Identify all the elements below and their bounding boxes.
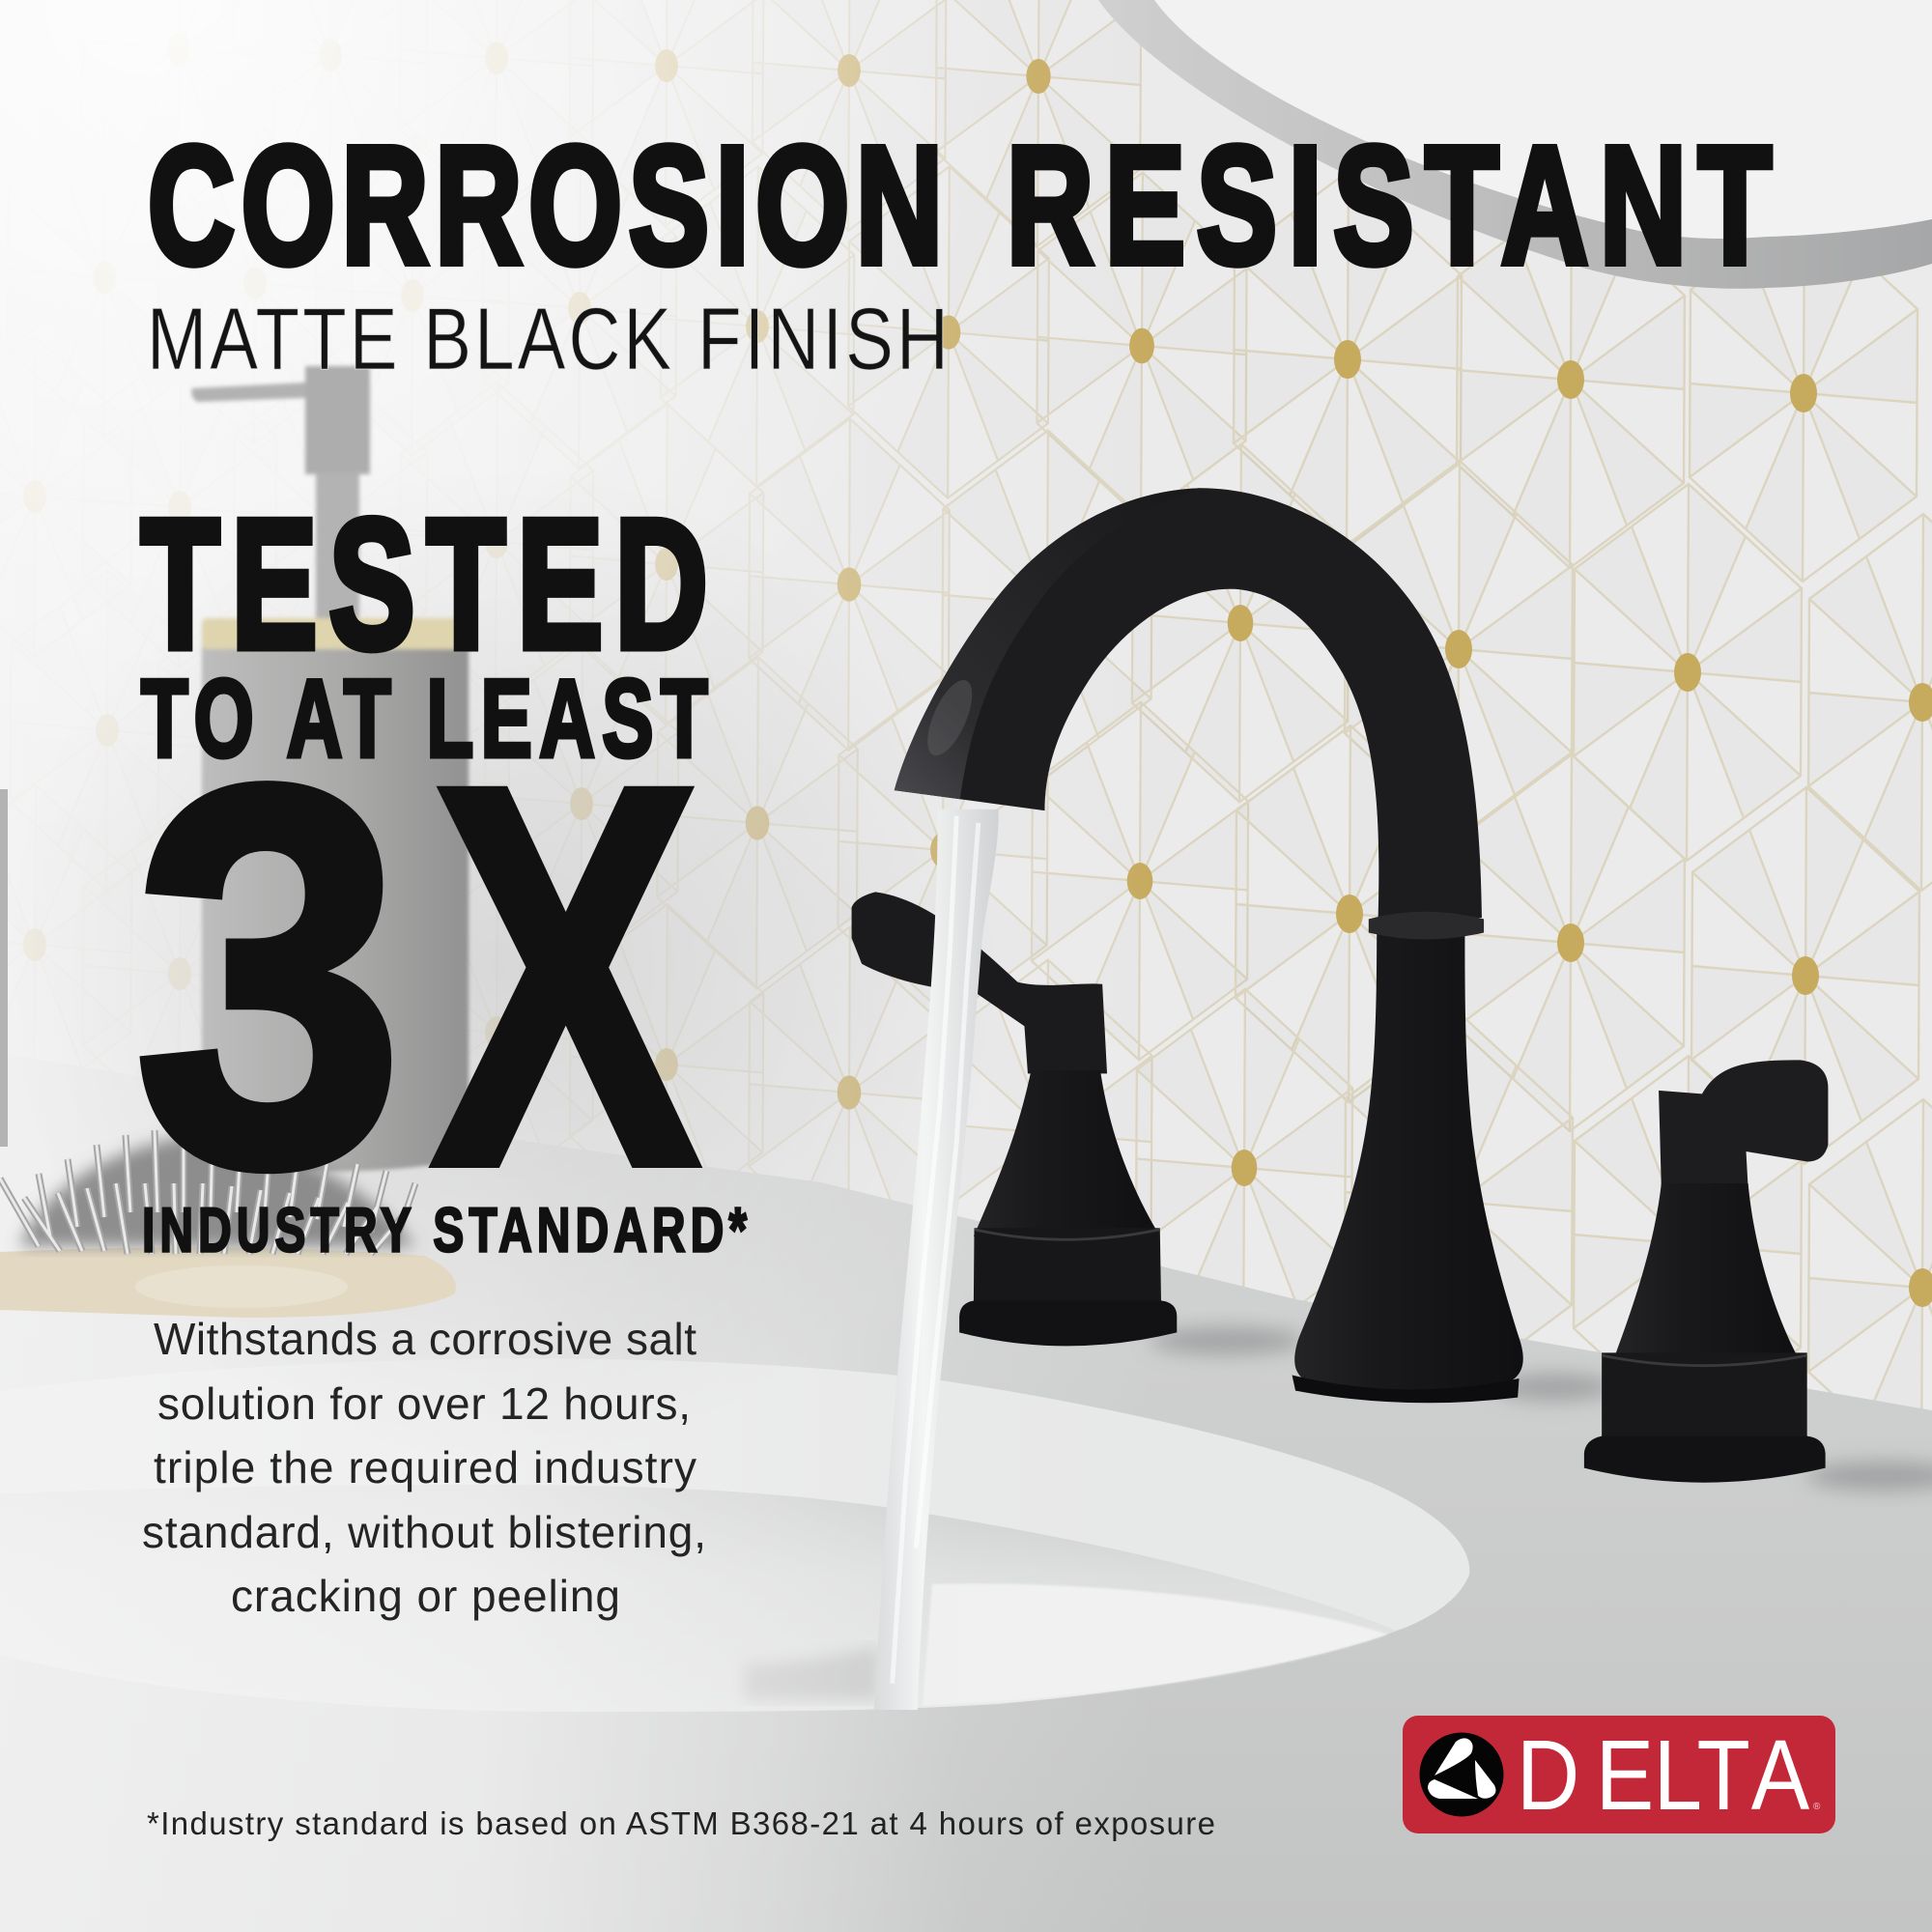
registered mark: ®: [1813, 1802, 1821, 1812]
3X: [134, 674, 700, 1277]
water stream: [874, 810, 999, 1710]
digit 3: 3: [134, 675, 404, 1277]
spout: [895, 488, 1482, 918]
description text: Withstands a corrosive salt: [154, 1314, 696, 1364]
claim: tested to at least 3X: [134, 482, 748, 1277]
title: CORROSION: [148, 112, 943, 298]
title: RESISTANT: [1007, 112, 1772, 298]
logo mark: [1420, 1733, 1503, 1816]
counter top: [0, 1053, 1932, 1932]
basin reflection: [744, 1646, 879, 1700]
faucet shadows on counter: [1150, 1327, 1932, 1491]
title: [148, 112, 1772, 298]
wall: star tile backsplash: [0, 0, 1932, 1476]
to at least: TO AT LEAST: [141, 657, 708, 780]
description text: [142, 1314, 706, 1621]
description text: standard, without blistering,: [142, 1507, 706, 1557]
spout body: [1293, 912, 1523, 1403]
hairbrush: [0, 1128, 456, 1318]
faucet: [852, 488, 1828, 1483]
letter X: X: [433, 674, 700, 1276]
footnote: *Industry standard is based on ASTM B368-21 at 4 hours of exposure: [147, 1805, 1215, 1841]
small object at left edge: [0, 789, 8, 1147]
basin bright floor: [923, 1583, 1387, 1706]
soap dispenser: [191, 366, 469, 1171]
description text: cracking or peeling: [231, 1571, 620, 1621]
sink lip and basin: [0, 1358, 1469, 1712]
left handle: [852, 892, 1177, 1346]
subtitle: MATTE BLACK FINISH: [147, 290, 949, 388]
right handle: [1584, 1060, 1828, 1483]
mirror arc: [1098, 0, 1932, 289]
description text: triple the required industry: [154, 1442, 696, 1492]
tested: TESTED: [141, 482, 708, 687]
industry standard: INDUSTRY STANDARD*: [142, 1196, 748, 1265]
description text: solution for over 12 hours,: [157, 1378, 691, 1429]
Delta logo: [1403, 1716, 1835, 1833]
wordmark: DELTA: [1517, 1719, 1810, 1831]
